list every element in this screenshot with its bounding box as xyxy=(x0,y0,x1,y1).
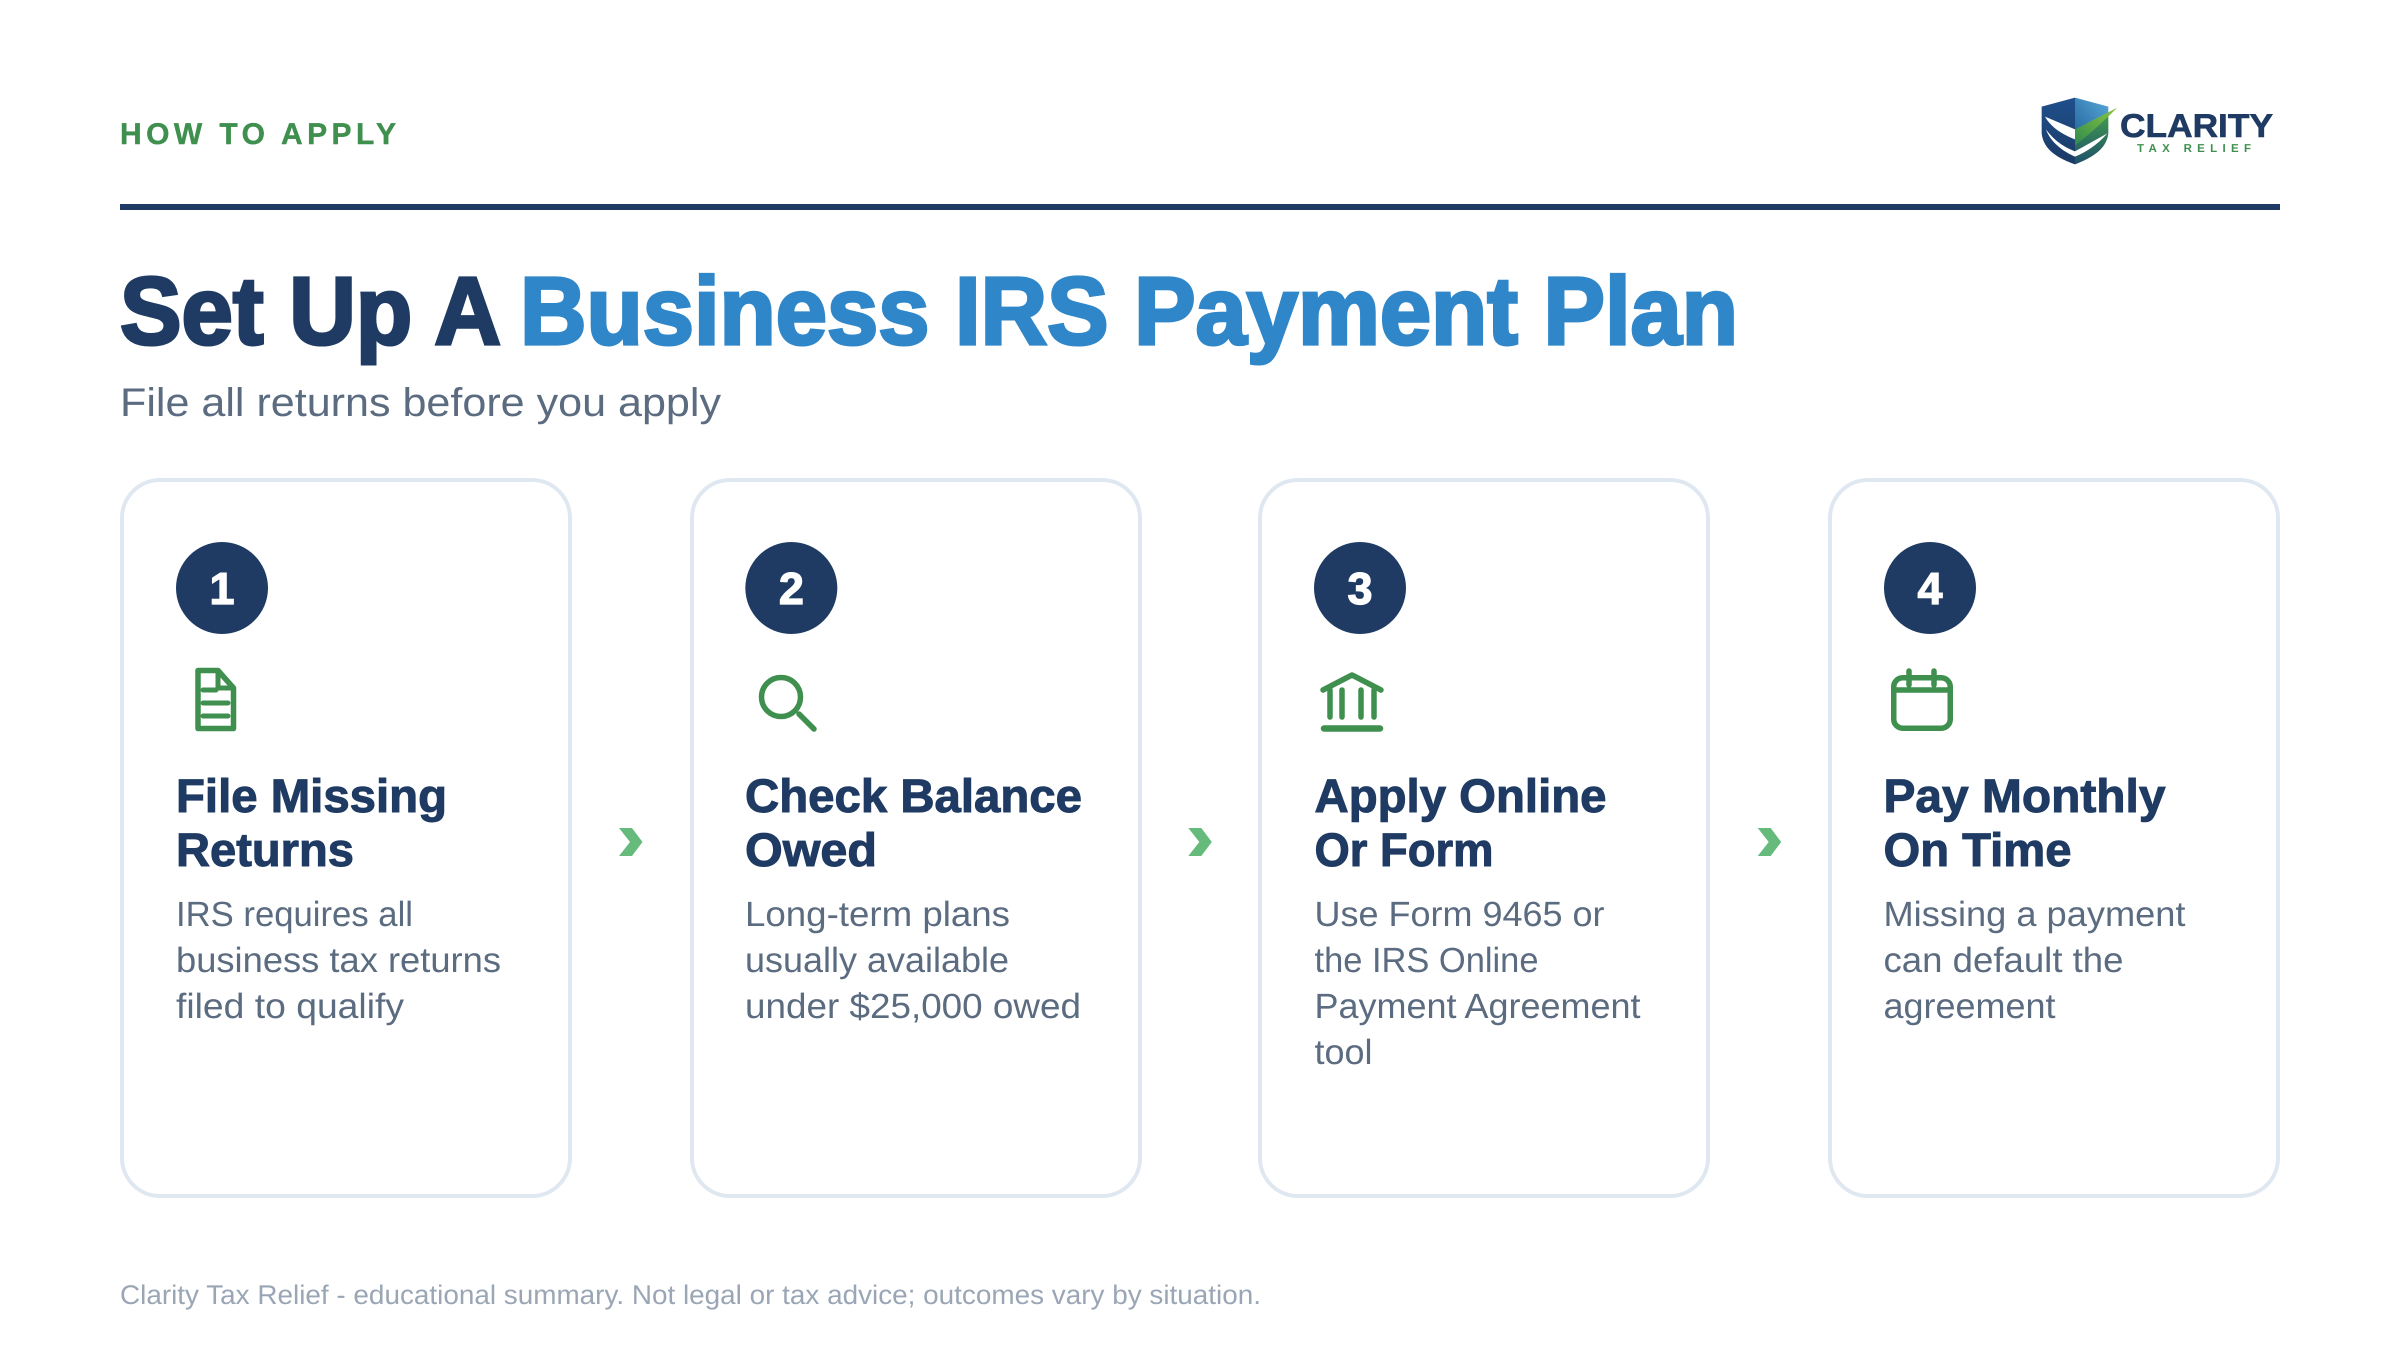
arrow 2 to 3 xyxy=(1188,828,1212,856)
description: IRS requires all xyxy=(176,895,413,934)
arrow 3 to 4 xyxy=(1758,828,1781,856)
title: Business IRS Payment Plan xyxy=(520,258,1738,365)
number badge 2: 2 xyxy=(779,563,804,614)
icon: bank xyxy=(1323,675,1381,728)
number badge 3 xyxy=(1314,542,1406,634)
description xyxy=(1314,895,1641,1072)
eyebrow label: HOW TO APPLY xyxy=(120,118,396,151)
number badge 1: 1 xyxy=(209,563,235,614)
title: Set Up A xyxy=(120,258,501,365)
panel: step 3 xyxy=(1260,480,1708,1196)
card frame xyxy=(1830,480,2278,1196)
description: Long-term plans xyxy=(745,895,1010,934)
number badge 3: 3 xyxy=(1347,563,1373,614)
card frame xyxy=(1260,480,1708,1196)
number badge 4: 4 xyxy=(1917,563,1943,614)
panel: step 2 xyxy=(692,480,1140,1196)
logo tagline: TAX RELIEF xyxy=(2137,143,2251,155)
number badge 2 xyxy=(745,542,837,634)
description: usually available xyxy=(745,941,1009,980)
heading: Returns xyxy=(176,823,354,876)
number badge 1 xyxy=(176,542,268,634)
description: under $25,000 owed xyxy=(745,987,1081,1026)
description: agreement xyxy=(1884,987,2056,1026)
icon: calendar xyxy=(1894,671,1950,728)
description xyxy=(745,895,1081,1026)
description: the IRS Online xyxy=(1314,941,1538,980)
description: Missing a payment xyxy=(1884,895,2186,934)
heading: On Time xyxy=(1884,823,2072,876)
card frame xyxy=(122,480,570,1196)
heading xyxy=(1314,769,1606,876)
icon: shield with check xyxy=(2042,98,2117,164)
description xyxy=(1884,895,2186,1026)
heading: Pay Monthly xyxy=(1884,769,2166,822)
heading: Or Form xyxy=(1314,823,1494,876)
description: Payment Agreement xyxy=(1314,987,1641,1026)
description: can default the xyxy=(1884,941,2124,980)
logo: Clarity Tax Relief xyxy=(2042,98,2273,164)
icon: document xyxy=(198,670,234,728)
header rule xyxy=(120,204,2280,210)
heading: File Missing xyxy=(176,769,447,822)
footer disclaimer: Clarity Tax Relief - educational summary. Not legal or tax advice; outcomes vary by situation. xyxy=(120,1280,1261,1310)
heading: Check Balance xyxy=(745,769,1082,822)
heading xyxy=(745,769,1082,876)
arrow 1 to 2 xyxy=(619,828,642,856)
description: filed to qualify xyxy=(176,987,405,1026)
heading: Apply Online xyxy=(1314,769,1606,822)
heading xyxy=(176,769,447,876)
heading: Owed xyxy=(745,823,877,876)
panel: step 1 xyxy=(122,480,570,1196)
card frame xyxy=(692,480,1140,1196)
logo wordmark: CLARITY xyxy=(2120,107,2273,144)
description xyxy=(176,895,501,1026)
icon: magnifier xyxy=(762,678,814,729)
subtitle: File all returns before you apply xyxy=(120,381,721,425)
description: Use Form 9465 or xyxy=(1314,895,1605,934)
description: business tax returns xyxy=(176,941,501,980)
number badge 4 xyxy=(1884,542,1976,634)
description: tool xyxy=(1314,1033,1372,1072)
panel: step 4 xyxy=(1830,480,2278,1196)
heading xyxy=(1884,769,2166,876)
